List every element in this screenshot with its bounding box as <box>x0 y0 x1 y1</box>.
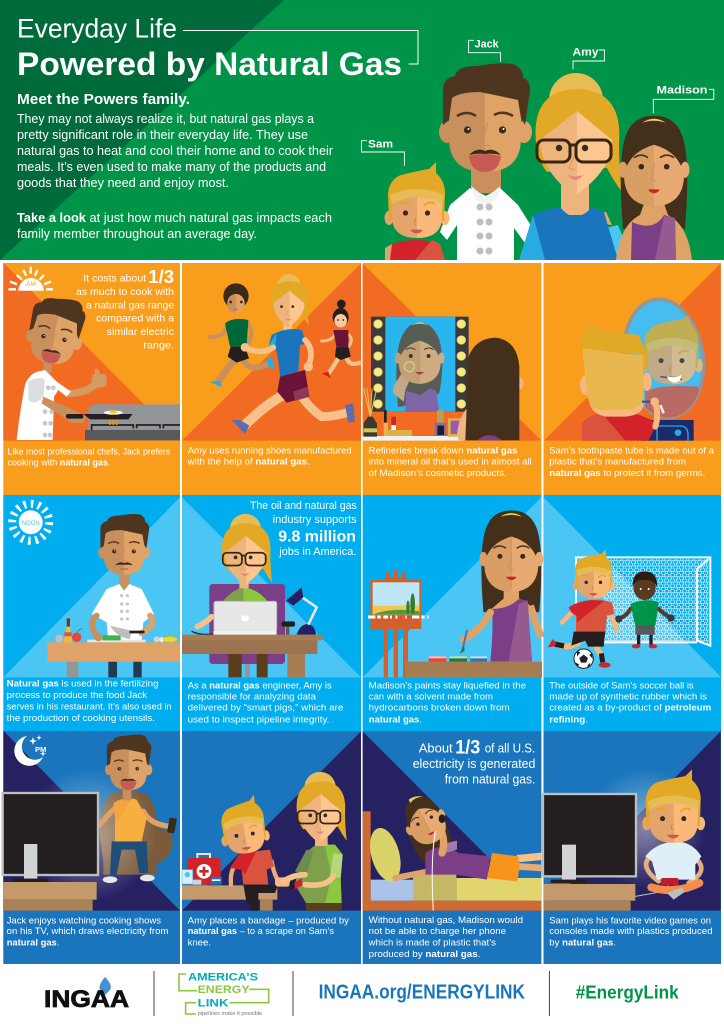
caption <box>8 446 170 469</box>
intro text: goods that they need and enjoy most. <box>17 176 229 190</box>
logo: INGAA: INGAA <box>44 986 129 1013</box>
callout: cost of cooking: similar electric <box>107 326 174 338</box>
illustration: Madison on bed <box>363 731 542 911</box>
name labels: Amy <box>572 46 599 58</box>
panel: Sam playing soccer <box>544 495 721 731</box>
caption: As a natural gas engineer, Amy is <box>188 680 332 691</box>
caption: Like most professional chefs, Jack prefers <box>8 446 170 457</box>
caption: the production of cooking utensils. <box>7 713 155 724</box>
caption: natural gas – to a scrape on Sam’s <box>188 926 334 937</box>
icon: PM moon <box>14 735 46 766</box>
caption: natural gas. <box>369 714 422 725</box>
intro text: They may not always realize it, but natural gas plays a <box>17 112 314 126</box>
caption: Without natural gas, Madison would <box>369 915 523 926</box>
illustration: Amy and children running <box>182 263 361 441</box>
caption <box>369 680 526 725</box>
caption: made up of synthetic rubber which is <box>549 691 707 702</box>
illustration: Madison at vanity mirror <box>363 263 541 441</box>
caption: of Madison’s cosmetic products. <box>369 468 507 479</box>
callout: cost of cooking: compared with a <box>96 313 174 325</box>
intro text: pretty significant role in their everyday life. They use <box>17 128 308 142</box>
caption <box>188 680 343 725</box>
icon: AM sun <box>8 267 53 291</box>
logo: INGAA <box>44 977 129 1013</box>
caption: Sam’s toothpaste tube is made out of a <box>549 445 715 456</box>
illustration: Powers family <box>384 63 692 260</box>
panel: Jack watching TV, evening <box>3 731 180 964</box>
figure: Madison <box>616 116 692 260</box>
caption: plastic that’s manufactured from <box>549 457 686 468</box>
caption <box>7 915 168 948</box>
illustration: Amy at laptop <box>182 497 361 677</box>
callout: cost of cooking: a natural gas range <box>86 299 174 311</box>
name labels <box>362 39 714 166</box>
panel: Madison cosmetics <box>363 263 541 495</box>
callout: electricity from natural gas: of all U.S. <box>485 740 535 755</box>
figure: Jack <box>439 63 535 260</box>
caption <box>369 445 532 479</box>
callout: cost of cooking: range. <box>143 339 174 351</box>
icon: PM moon: PM <box>35 745 46 754</box>
caption: Refineries break down natural gas <box>369 445 517 456</box>
caption: knee. <box>188 937 211 948</box>
icon: noon sun: NOON <box>22 521 40 527</box>
callout: electricity from natural gas <box>413 738 535 787</box>
callout: jobs in America: The oil and natural gas <box>250 500 357 512</box>
caption: consoles made with plastics produced <box>549 926 713 937</box>
figure: Amy <box>519 73 632 260</box>
panel: Amy the engineer <box>182 495 361 731</box>
panel: Jack cooking, morning <box>3 263 180 495</box>
website link: INGAA.org/ENERGYLINK <box>319 981 525 1003</box>
intro text: natural gas to heat and cool their home and to cook their <box>17 144 333 158</box>
illustration: Jack at gas range <box>3 263 180 441</box>
logo: America's Energy Link: pipelines make it possible <box>198 1011 262 1017</box>
title: Everyday Life <box>17 14 177 44</box>
callout: jobs in America: 9.8 million <box>278 528 356 545</box>
caption: Jack enjoys watching cooking shows <box>7 915 161 926</box>
callout: electricity from natural gas: 1/3 <box>455 738 480 759</box>
caption <box>187 445 352 468</box>
caption: Sam plays his favorite video games on <box>549 915 711 926</box>
caption <box>7 679 172 724</box>
illustration: Madison with easel and paints <box>363 497 543 677</box>
hashtag: #EnergyLink <box>576 982 680 1002</box>
name labels: Sam <box>368 138 393 150</box>
caption: by natural gas. <box>549 937 616 948</box>
caption <box>549 680 711 725</box>
logo: America's Energy Link <box>179 972 269 1017</box>
logo: America's Energy Link: AMERICA’S <box>188 972 258 984</box>
intro text: meals. It’s even used to make many of the products and <box>17 160 326 174</box>
callout: cost of cooking: 1/3 <box>148 267 174 287</box>
figure: Sam <box>384 162 450 260</box>
callout: electricity from natural gas: electricity is generated <box>413 756 535 771</box>
caption <box>549 915 713 948</box>
caption: Madison’s paints stay liquefied in the <box>369 680 526 691</box>
caption: cooking with natural gas. <box>8 458 110 469</box>
callout: electricity from natural gas: About <box>419 740 453 755</box>
caption: created as a by-product of petroleum <box>549 703 711 714</box>
header panel <box>0 0 724 260</box>
caption: with the help of natural gas. <box>187 457 310 468</box>
callout: jobs in America: industry supports <box>273 514 357 526</box>
caption: Natural gas is used in the fertilizing <box>7 679 158 690</box>
panel: Jack preparing food, noon <box>3 495 180 731</box>
caption: natural gas. <box>7 937 59 948</box>
illustration: soccer goal and players <box>544 497 721 677</box>
caption: The outside of Sam’s soccer ball is <box>549 680 694 691</box>
footer <box>0 965 724 1024</box>
name labels: Madison <box>656 85 708 97</box>
caption <box>368 915 523 960</box>
panel: Madison painting <box>363 495 543 731</box>
callout: cost of cooking: It costs about <box>83 273 146 285</box>
caption: used to inspect pipeline integrity. <box>188 714 329 725</box>
illustration: Jack in armchair with TV <box>3 731 180 911</box>
caption <box>188 915 349 948</box>
intro text: Take a look at just how much natural gas impacts each <box>17 211 332 225</box>
caption: on his TV, which draws electricity from <box>7 926 168 937</box>
callout: cost of cooking <box>76 267 174 351</box>
caption: produced by natural gas. <box>369 949 480 960</box>
title: Powered by Natural Gas <box>17 46 402 82</box>
caption: delivered by “smart pigs,” which are <box>188 703 343 714</box>
callout: jobs in America: jobs in America. <box>278 546 356 558</box>
illustration: Jack chopping food <box>3 497 180 677</box>
caption: process to produce the food Jack <box>7 690 147 701</box>
caption: not be able to charge her phone <box>369 926 506 937</box>
logo: America's Energy Link: LINK <box>198 998 229 1010</box>
caption: refining. <box>549 714 588 725</box>
name labels: Jack <box>475 39 499 51</box>
caption: into mineral oil that’s used in almost all <box>369 457 532 468</box>
caption: can with a solvent made from <box>369 691 493 702</box>
intro text <box>17 92 333 241</box>
caption: Amy places a bandage – produced by <box>188 915 349 926</box>
illustration: first aid scene <box>182 731 361 911</box>
intro text: family member throughout an average day. <box>17 227 257 241</box>
icon: AM sun: AM <box>26 281 36 288</box>
intro text: Meet the Powers family. <box>17 92 190 108</box>
icon: noon sun <box>12 504 49 541</box>
panel: Sam brushing teeth <box>544 263 721 495</box>
caption: natural gas to protect it from germs. <box>549 468 705 479</box>
logo: America's Energy Link: ENERGY <box>198 984 250 996</box>
panel: family running <box>182 263 361 495</box>
callout: jobs in America <box>250 500 357 558</box>
caption <box>549 445 715 479</box>
callout: electricity from natural gas: from natural gas. <box>445 772 535 787</box>
title <box>17 14 418 82</box>
caption: hydrocarbons broken down from <box>369 703 510 714</box>
callout: cost of cooking: as much to cook with <box>76 286 174 298</box>
illustration: Sam at bathroom mirror <box>544 263 721 441</box>
caption: which is made of plastic that’s <box>368 937 496 948</box>
caption: serves in his restaurant. It’s also used in <box>7 701 172 712</box>
caption: Amy uses running shoes manufactured <box>188 445 352 456</box>
caption: responsible for analyzing data <box>188 692 317 703</box>
illustration: Sam with game console <box>543 731 721 911</box>
panel: Sam playing video games <box>543 731 721 964</box>
panel: Amy bandaging Sam <box>182 731 361 964</box>
panel: Madison on the phone <box>363 731 542 964</box>
